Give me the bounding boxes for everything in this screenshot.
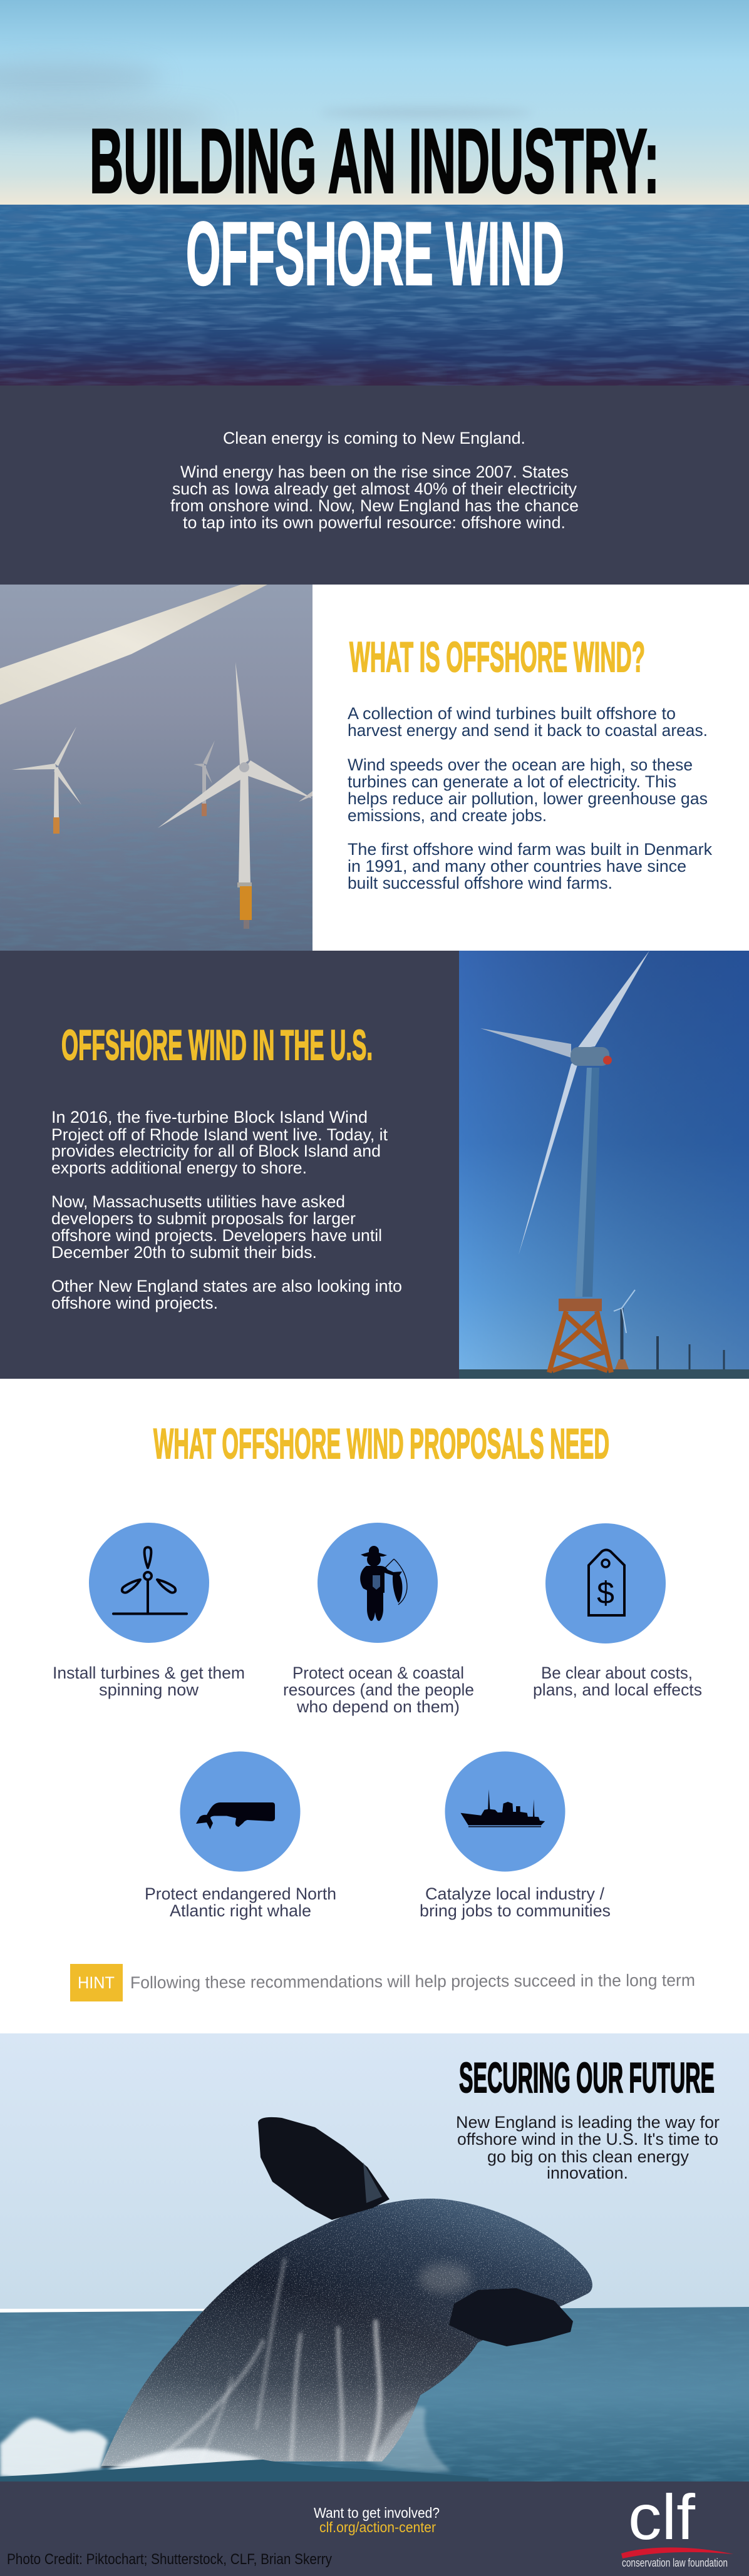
body text: exports additional energy to shore. — [51, 1158, 307, 1177]
intro text: Clean energy is coming to New England. — [223, 429, 525, 447]
body text: offshore wind projects. — [51, 1294, 218, 1312]
whale body — [94, 2197, 595, 2468]
panel: securing our future — [0, 2033, 749, 2481]
label: Catalyze local industry / — [425, 1884, 604, 1903]
body text — [456, 2113, 720, 2182]
label: plans, and local effects — [533, 1680, 702, 1699]
callout: hint — [70, 1964, 695, 2001]
photo: breaching right whale — [0, 2033, 749, 2481]
body text — [51, 1108, 402, 1312]
callout: hint: HINT — [78, 1973, 115, 1992]
intro text — [170, 429, 579, 532]
item: be clear about costs — [533, 1523, 702, 1699]
call to action — [314, 2505, 440, 2535]
hero banner — [0, 0, 749, 388]
icon: ship — [461, 1789, 545, 1827]
hero photo: ocean horizon — [0, 0, 749, 388]
label: bring jobs to communities — [420, 1901, 611, 1920]
item: install turbines — [53, 1523, 245, 1699]
front turbine — [158, 662, 313, 929]
panel: intro — [0, 386, 749, 585]
heading: OFFSHORE WIND IN THE U.S. — [61, 1021, 373, 1069]
body text: Wind speeds over the ocean are high, so these — [348, 755, 693, 774]
title — [90, 110, 659, 304]
label: Protect ocean & coastal — [292, 1664, 464, 1682]
body text: built successful offshore wind farms. — [348, 874, 612, 892]
body text: helps reduce air pollution, lower greenhouse gas — [348, 789, 708, 808]
body text: December 20th to submit their bids. — [51, 1243, 317, 1262]
label: spinning now — [99, 1680, 199, 1699]
body text: New England is leading the way for — [456, 2113, 720, 2132]
logo: conservation law foundation — [621, 2481, 733, 2569]
panel: what offshore wind proposals need — [0, 1379, 749, 2033]
label — [53, 1664, 245, 1699]
body text: Now, Massachusetts utilities have asked — [51, 1192, 345, 1211]
back turbine — [194, 740, 215, 816]
body text: go big on this clean energy — [487, 2147, 689, 2166]
body text: turbines can generate a lot of electricity. This — [348, 772, 676, 791]
item: protect ocean and coastal resources — [283, 1523, 474, 1716]
body text: in 1991, and many other countries have since — [348, 857, 686, 876]
call to action: clf.org/action-center — [319, 2519, 436, 2535]
panel: footer — [0, 2481, 749, 2576]
body text: innovation. — [547, 2164, 628, 2182]
body text: offshore wind in the U.S. It's time to — [457, 2130, 718, 2149]
icon: price tag — [589, 1550, 624, 1615]
icon: whale — [196, 1802, 275, 1829]
body text: The first offshore wind farm was built in Denmark — [348, 840, 712, 859]
label — [283, 1664, 474, 1716]
body text: provides electricity for all of Block Island and — [51, 1142, 381, 1160]
label — [145, 1884, 336, 1920]
panel: what is offshore wind — [0, 585, 749, 951]
label: resources (and the people — [283, 1680, 474, 1699]
intro text: from onshore wind. Now, New England has the chance — [170, 496, 579, 515]
body text: emissions, and create jobs. — [348, 806, 547, 825]
splash and foam — [0, 2407, 451, 2480]
label: Atlantic right whale — [170, 1901, 311, 1920]
callout: hint: Following these recommendations will help projects succeed in the long term — [130, 1971, 695, 1992]
photo: Block Island turbine — [459, 951, 749, 1379]
body text: Project off of Rhode Island went live. Today, it — [51, 1125, 388, 1144]
icon: wind turbine — [113, 1547, 187, 1613]
body text — [348, 704, 712, 892]
label: Protect endangered North — [145, 1884, 336, 1903]
body text: harvest energy and send it back to coastal areas. — [348, 721, 708, 740]
item: catalyze local industry — [420, 1751, 611, 1920]
body text: offshore wind projects. Developers have until — [51, 1226, 382, 1245]
label — [420, 1884, 611, 1920]
left turbine — [12, 727, 81, 834]
whale lower flipper — [449, 2288, 573, 2346]
label: Be clear about costs, — [541, 1664, 693, 1682]
label: who depend on them) — [296, 1697, 460, 1716]
panel: offshore wind in the U.S. — [0, 951, 749, 1379]
item: protect right whale — [145, 1751, 336, 1920]
intro text: Wind energy has been on the rise since 2007. States — [180, 463, 569, 481]
logo: conservation law foundation: clf — [628, 2481, 696, 2553]
body text: developers to submit proposals for larger — [51, 1209, 356, 1228]
intro text: to tap into its own powerful resource: offshore wind. — [183, 513, 566, 532]
icon: price tag: $ — [597, 1575, 614, 1610]
photo credit: Photo Credit: Piktochart; Shutterstock, CLF, Brian Skerry — [7, 2551, 332, 2568]
call to action: Want to get involved? — [314, 2505, 440, 2521]
whale upper flipper — [258, 2117, 390, 2220]
label — [533, 1664, 702, 1699]
label: Install turbines & get them — [53, 1664, 245, 1682]
icon: fisherman — [360, 1546, 407, 1621]
photo: turbines in grey sea — [0, 585, 313, 951]
intro text: such as Iowa already get almost 40% of their electricity — [172, 479, 577, 498]
body text: In 2016, the five-turbine Block Island Wind — [51, 1108, 368, 1127]
body text: Other New England states are also looking into — [51, 1277, 402, 1296]
body text: A collection of wind turbines built offshore to — [348, 704, 676, 723]
